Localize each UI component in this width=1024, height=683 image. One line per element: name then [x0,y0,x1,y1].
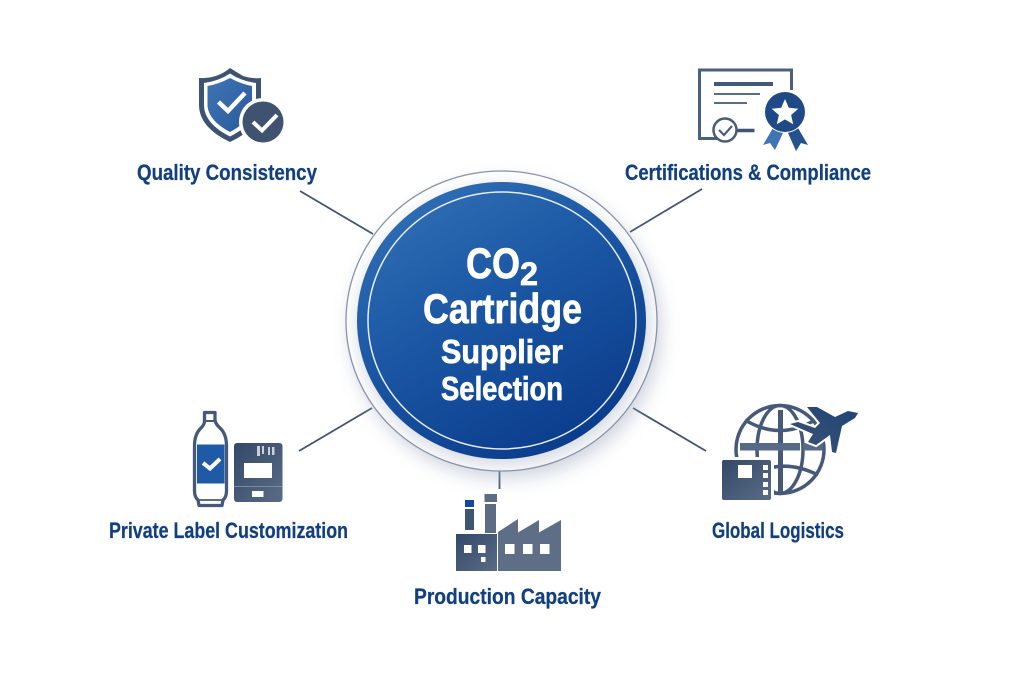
panel: global logistics [712,406,858,543]
panel: private label customization [109,412,348,543]
central hub [346,171,662,480]
label: certifications and compliance: Certifications & Compliance [625,160,871,185]
hub title: CO [466,240,520,288]
panel: production capacity [414,494,601,609]
label: private label customization: Private Label Customization [109,518,348,543]
icon: airplane [790,407,858,453]
hub title [423,240,582,407]
hub title: 2 [520,256,538,292]
label: quality consistency: Quality Consistency [137,160,317,185]
connector lines [299,189,706,489]
hub title: Selection [441,370,563,407]
panel: quality consistency [137,68,317,185]
icon: globe, plane and parcel [719,406,858,503]
icon: shield with check badge [199,68,287,146]
label: production capacity: Production Capacity [414,584,601,609]
hub title: Cartridge [423,285,582,332]
icon: bottle and box [194,412,282,506]
icon: factory [456,494,561,571]
label: global logistics: Global Logistics [712,518,844,543]
icon: certificate with ribbon [700,70,808,151]
hub title: Supplier [441,333,563,370]
panel: certifications and compliance [625,70,871,185]
